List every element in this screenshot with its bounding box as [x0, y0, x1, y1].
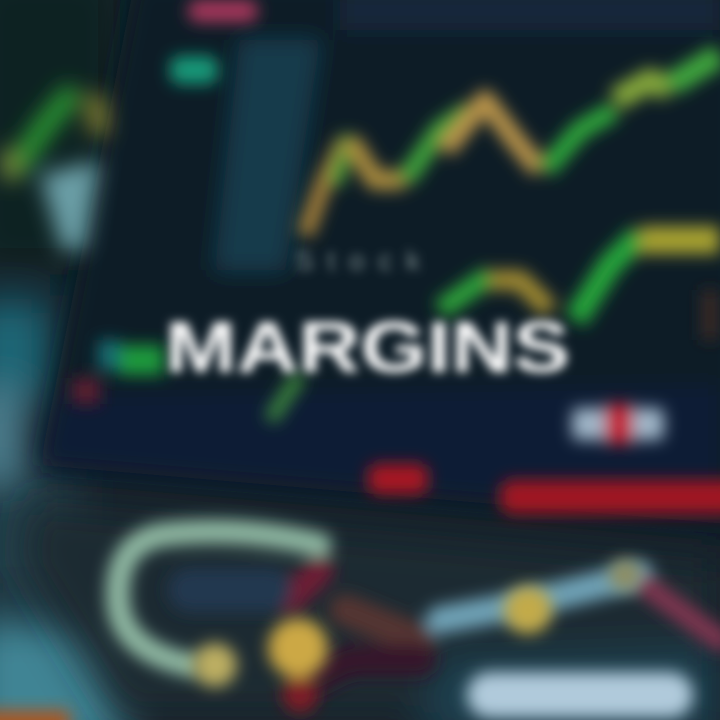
red indicators and status box [368, 404, 720, 514]
headline text: MARGINS [165, 308, 570, 388]
small chart label: Stock [295, 245, 421, 276]
cable loop at bottom left [118, 532, 720, 695]
left backdrop [0, 0, 130, 720]
lower chart line [270, 235, 720, 420]
monitor bottom edge and desk [20, 500, 720, 720]
left plant-like chart [8, 90, 100, 250]
left screen markers [72, 340, 164, 404]
monitor screen [40, 0, 720, 525]
upper chart line [305, 55, 720, 235]
orange corner [0, 710, 70, 720]
yellow beads [193, 559, 641, 713]
top markers [170, 0, 258, 84]
